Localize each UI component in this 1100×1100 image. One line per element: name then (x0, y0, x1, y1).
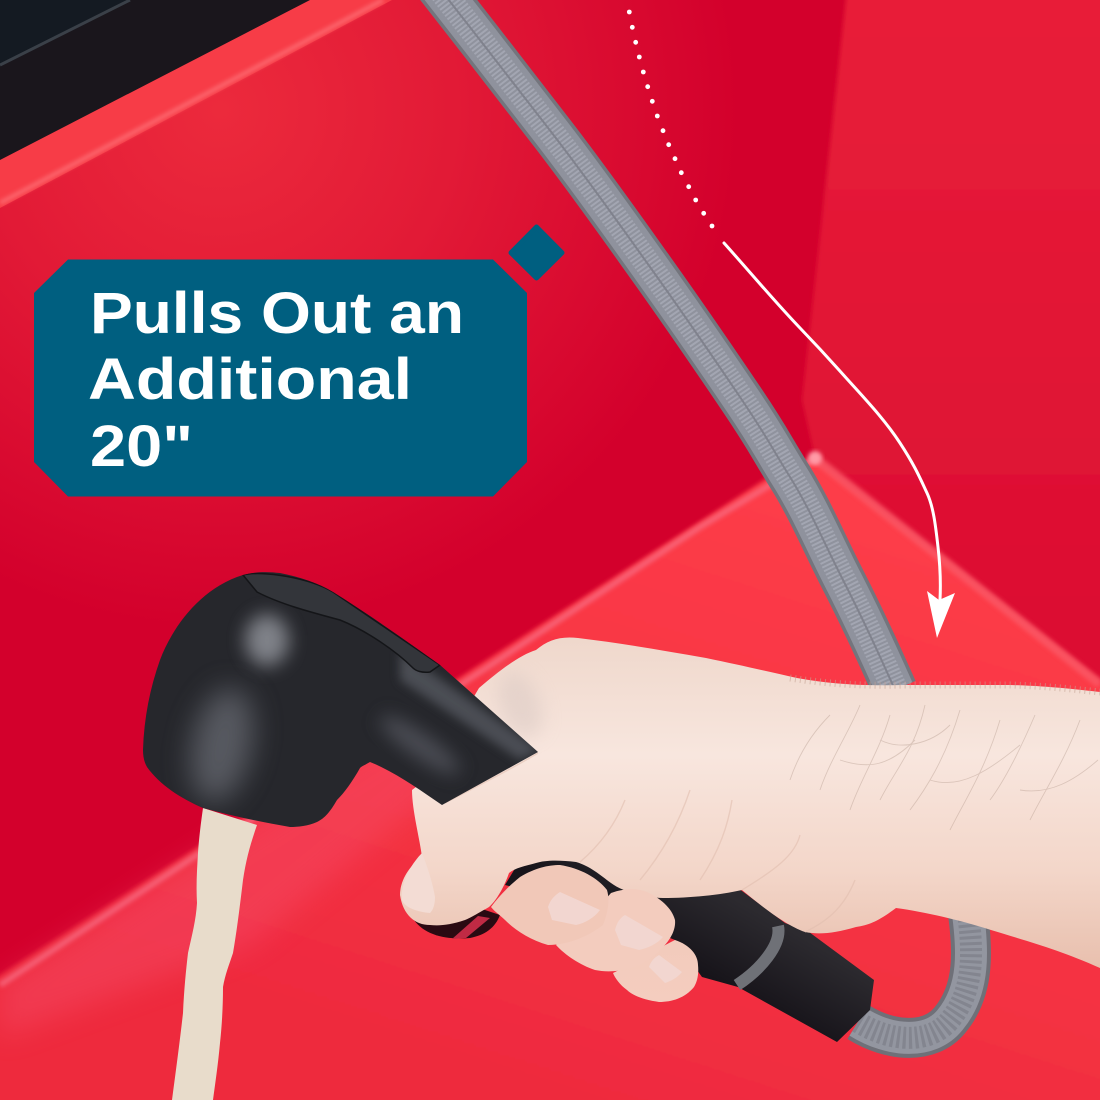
sprayer handle lower (505, 852, 874, 1042)
curved arrow (724, 243, 955, 638)
left floor ridge highlight (0, 458, 815, 985)
sink rim (0, 0, 392, 208)
callout badge (34, 260, 527, 496)
hand and arm (400, 638, 1100, 1002)
rim highlight (0, 0, 383, 203)
skin creases (445, 753, 855, 932)
hose lower (858, 900, 971, 1038)
water stream (172, 808, 257, 1100)
neck top sheen (400, 650, 540, 760)
heading: Pulls Out an (90, 281, 464, 346)
hose upper (430, 0, 895, 690)
lower highlight (181, 682, 263, 808)
little finger (613, 940, 698, 1002)
sprayer head and neck (143, 572, 538, 827)
counter line (0, 0, 130, 65)
palm shadow (490, 666, 550, 744)
dotted path (627, 10, 714, 228)
right floor ridge highlight (815, 458, 1100, 684)
sprayer collar (737, 926, 778, 985)
head highlight (245, 614, 289, 666)
wrist fuzz (790, 678, 1100, 692)
diamond accent (511, 227, 562, 278)
middle finger (556, 889, 675, 971)
heading: 20" (90, 414, 193, 479)
little nail (649, 955, 682, 983)
heading: Additional (88, 347, 412, 412)
drain (414, 905, 500, 939)
arm hairs (790, 705, 1098, 830)
neck highlight (378, 712, 462, 778)
button (243, 574, 440, 672)
middle nail (615, 915, 663, 950)
corner glint (808, 451, 822, 465)
sink floor (0, 458, 1100, 1100)
thumb nail (402, 853, 435, 913)
right wall (802, 0, 1100, 700)
index finger (491, 865, 608, 945)
index nail (548, 892, 600, 925)
floor glow band (0, 715, 440, 1037)
counter top (0, 0, 130, 65)
black counter edge (0, 0, 310, 160)
